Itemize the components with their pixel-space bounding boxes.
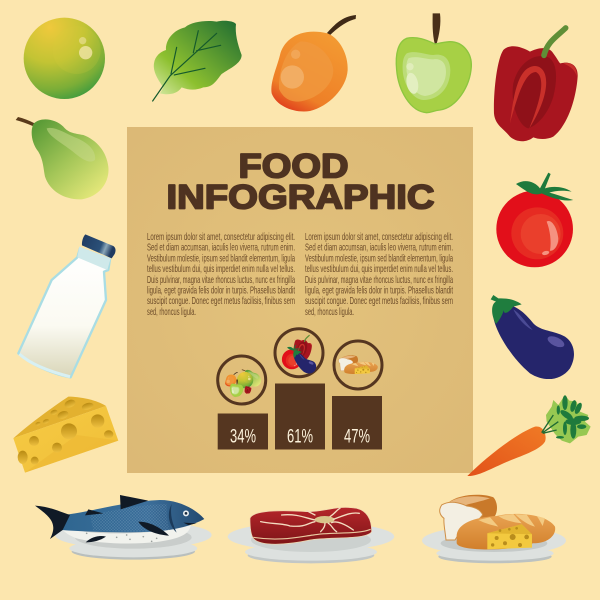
icon: lime (24, 18, 105, 99)
bar chart (218, 329, 382, 450)
icon: red bell pepper (494, 28, 578, 141)
icon: bread and cheese on plate (422, 495, 566, 563)
text block: left column: Sed et diam accumsan, iaculis leo viverra, rutrum enim. (147, 243, 295, 254)
title: FOOD (238, 148, 348, 186)
panel: central card (127, 127, 473, 473)
icon: eggplant (491, 295, 574, 379)
title: INFOGRAPHIC (166, 178, 434, 216)
icon circle: vegetables (275, 329, 323, 377)
text block: right column: sed, rhoncus ligula. (305, 307, 354, 318)
text block: left column: Lorem ipsum dolor sit amet, consectetur adipiscing elit. (147, 232, 295, 243)
bar: 47% (332, 396, 382, 450)
text block: left column: Duis pulvinar, magna vitae rhoncus luctus, nunc ex fringilla (147, 275, 295, 286)
icon: lettuce leaf (152, 21, 242, 102)
bar: 34% (218, 414, 268, 450)
text block: left column: ligula, eget gravida felis dolor in turpis. Phasellus blandit (147, 286, 295, 296)
icon: tomato (496, 173, 573, 267)
text block: left column: sed, rhoncus ligula. (147, 307, 196, 318)
text block: right column: Lorem ipsum dolor sit amet, consectetur adipiscing elit. (305, 232, 453, 243)
bar: 61% (275, 384, 325, 450)
icon: apple (396, 13, 471, 113)
icon: cheese wedge (13, 397, 118, 473)
icon: carrot (467, 395, 591, 476)
text block: right column (305, 232, 453, 318)
text block: right column: suscipit congue. Donec eget metus facilisis, finibus sem (305, 296, 453, 307)
icon: steak on plate (228, 507, 394, 563)
text block: left column: Vestibulum molestie, ipsum sed blandit elementum, ligula (147, 253, 295, 264)
text block: right column: Sed et diam accumsan, iaculis leo viverra, rutrum enim. (305, 243, 453, 254)
icon circle: bread and cheese (334, 341, 382, 389)
text block: left column: suscipit congue. Donec eget metus facilisis, finibus sem (147, 296, 295, 307)
text block: left column: tellus vestibulum dui, quis imperdiet enim nulla vel tellus. (147, 264, 295, 275)
title (166, 148, 434, 216)
text block: right column: tellus vestibulum dui, quis imperdiet enim nulla vel tellus. (305, 264, 453, 275)
bar: 34%: 34% (230, 426, 256, 448)
icon: pear (16, 117, 109, 199)
icon circle: fruit (218, 356, 266, 404)
text block: left column (147, 232, 295, 318)
bar: 47%: 47% (344, 426, 370, 448)
icon: milk bottle (18, 234, 116, 377)
text block: right column: Duis pulvinar, magna vitae rhoncus luctus, nunc ex fringilla (305, 275, 453, 286)
icon: mango (271, 15, 356, 111)
text block: right column: ligula, eget gravida felis dolor in turpis. Phasellus blandit (305, 286, 453, 296)
bar: 61%: 61% (287, 426, 313, 448)
text block: right column: Vestibulum molestie, ipsum sed blandit elementum, ligula (305, 253, 453, 264)
icon: fish on plate (35, 495, 212, 560)
